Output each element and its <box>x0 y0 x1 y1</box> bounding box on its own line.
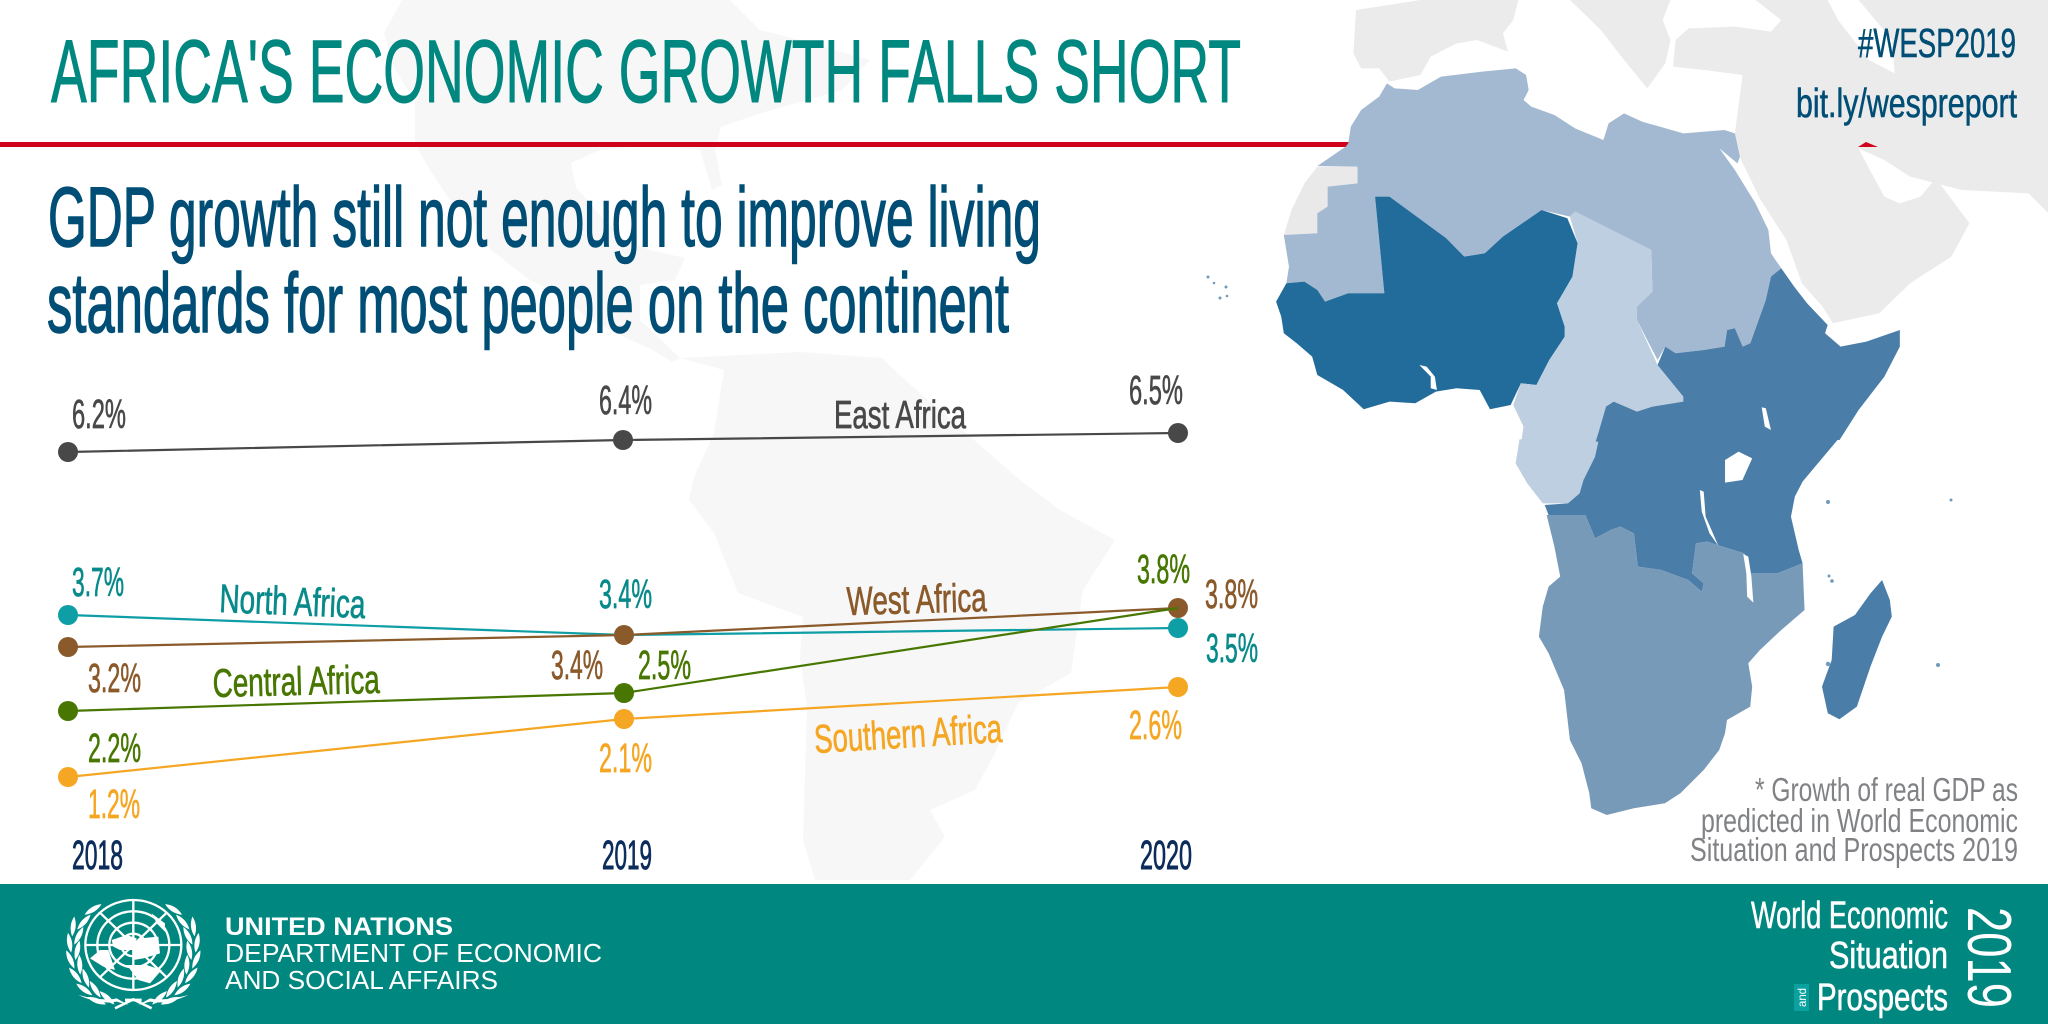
WESP report logo: Situation <box>1829 935 1948 977</box>
series: West Africa <box>58 571 1258 701</box>
series: West Africa: 3.8% <box>1205 571 1258 617</box>
WESP report logo <box>1751 895 2023 1019</box>
hashtag and link <box>1796 20 2017 126</box>
line chart of GDP growth <box>58 367 1258 878</box>
x-axis years: 2020 <box>1140 832 1192 878</box>
WESP report logo: and <box>1795 988 1809 1007</box>
footer band <box>0 884 2048 1024</box>
series: Southern Africa: Southern Africa <box>813 707 1004 762</box>
x-axis years: 2019 <box>602 832 652 878</box>
series: East Africa: 6.5% <box>1129 367 1183 413</box>
lakes Victoria and Tanganyika <box>1700 452 1752 546</box>
series: East Africa: 6.2% <box>72 391 126 437</box>
series: Southern Africa: 2.1% <box>599 735 652 781</box>
region: East Africa north <box>1596 268 1900 442</box>
footnote <box>1690 771 2018 868</box>
series: West Africa: 3.4% <box>551 642 603 688</box>
series: West Africa: West Africa <box>846 576 988 624</box>
"and" tag <box>1794 984 1809 1011</box>
series: West Africa: 3.2% <box>88 655 141 701</box>
series: North Africa: 3.5% <box>1206 625 1258 671</box>
title: AFRICA'S ECONOMIC GROWTH FALLS SHORT <box>51 21 1241 121</box>
Madagascar <box>1822 580 1892 719</box>
x-axis years <box>72 832 1192 878</box>
region: West Africa <box>1276 197 1578 409</box>
lake Turkana <box>1762 407 1771 430</box>
series: Southern Africa <box>58 677 1188 827</box>
region: North Africa <box>1284 68 1781 360</box>
region: Southern Africa <box>1539 515 1805 815</box>
region: Central Africa north <box>1513 212 1683 462</box>
red divider line <box>0 142 1350 147</box>
x-axis years: 2018 <box>72 832 123 878</box>
series: Southern Africa: 2.6% <box>1129 702 1182 748</box>
region: Western Sahara (no data) <box>1284 167 1358 235</box>
series: East Africa: 6.4% <box>599 377 652 423</box>
series: Central Africa: 2.2% <box>88 725 141 771</box>
subtitle heading: GDP growth still not enough to improve living <box>48 170 1041 264</box>
series: Central Africa: Central Africa <box>212 658 381 706</box>
grey Europe and Middle East map <box>1353 0 2048 323</box>
WESP report logo: Prospects <box>1817 977 1948 1019</box>
series: North Africa: 3.4% <box>599 571 652 617</box>
subtitle heading <box>47 170 1041 350</box>
small islands <box>1206 276 1952 667</box>
red sea-gap fragment of divider <box>1858 142 1878 147</box>
UN emblem <box>64 900 203 1008</box>
series: East Africa <box>58 367 1188 462</box>
series: North Africa <box>58 559 1258 671</box>
series: East Africa: East Africa <box>834 394 966 437</box>
lake Malawi <box>1743 554 1753 603</box>
series: Central Africa <box>58 546 1190 771</box>
series: Southern Africa: 1.2% <box>88 781 140 827</box>
faint world map background <box>384 0 1115 880</box>
department name: UNITED NATIONS <box>225 913 453 941</box>
series: North Africa: North Africa <box>219 577 367 627</box>
region: East Africa south <box>1545 439 1839 592</box>
department name <box>225 913 602 995</box>
series: Central Africa: 2.5% <box>638 642 691 688</box>
department name: DEPARTMENT OF ECONOMIC <box>225 938 602 968</box>
series: North Africa: 3.7% <box>72 559 124 605</box>
subtitle heading: standards for most people on the continent <box>47 256 1009 350</box>
region: Central Africa south <box>1516 439 1599 503</box>
lake Volta <box>1419 365 1437 390</box>
WESP report logo: World Economic <box>1751 895 1948 937</box>
department name: AND SOCIAL AFFAIRS <box>225 965 498 995</box>
map of Africa by region <box>1206 68 1952 815</box>
series: Central Africa: 3.8% <box>1137 546 1190 592</box>
